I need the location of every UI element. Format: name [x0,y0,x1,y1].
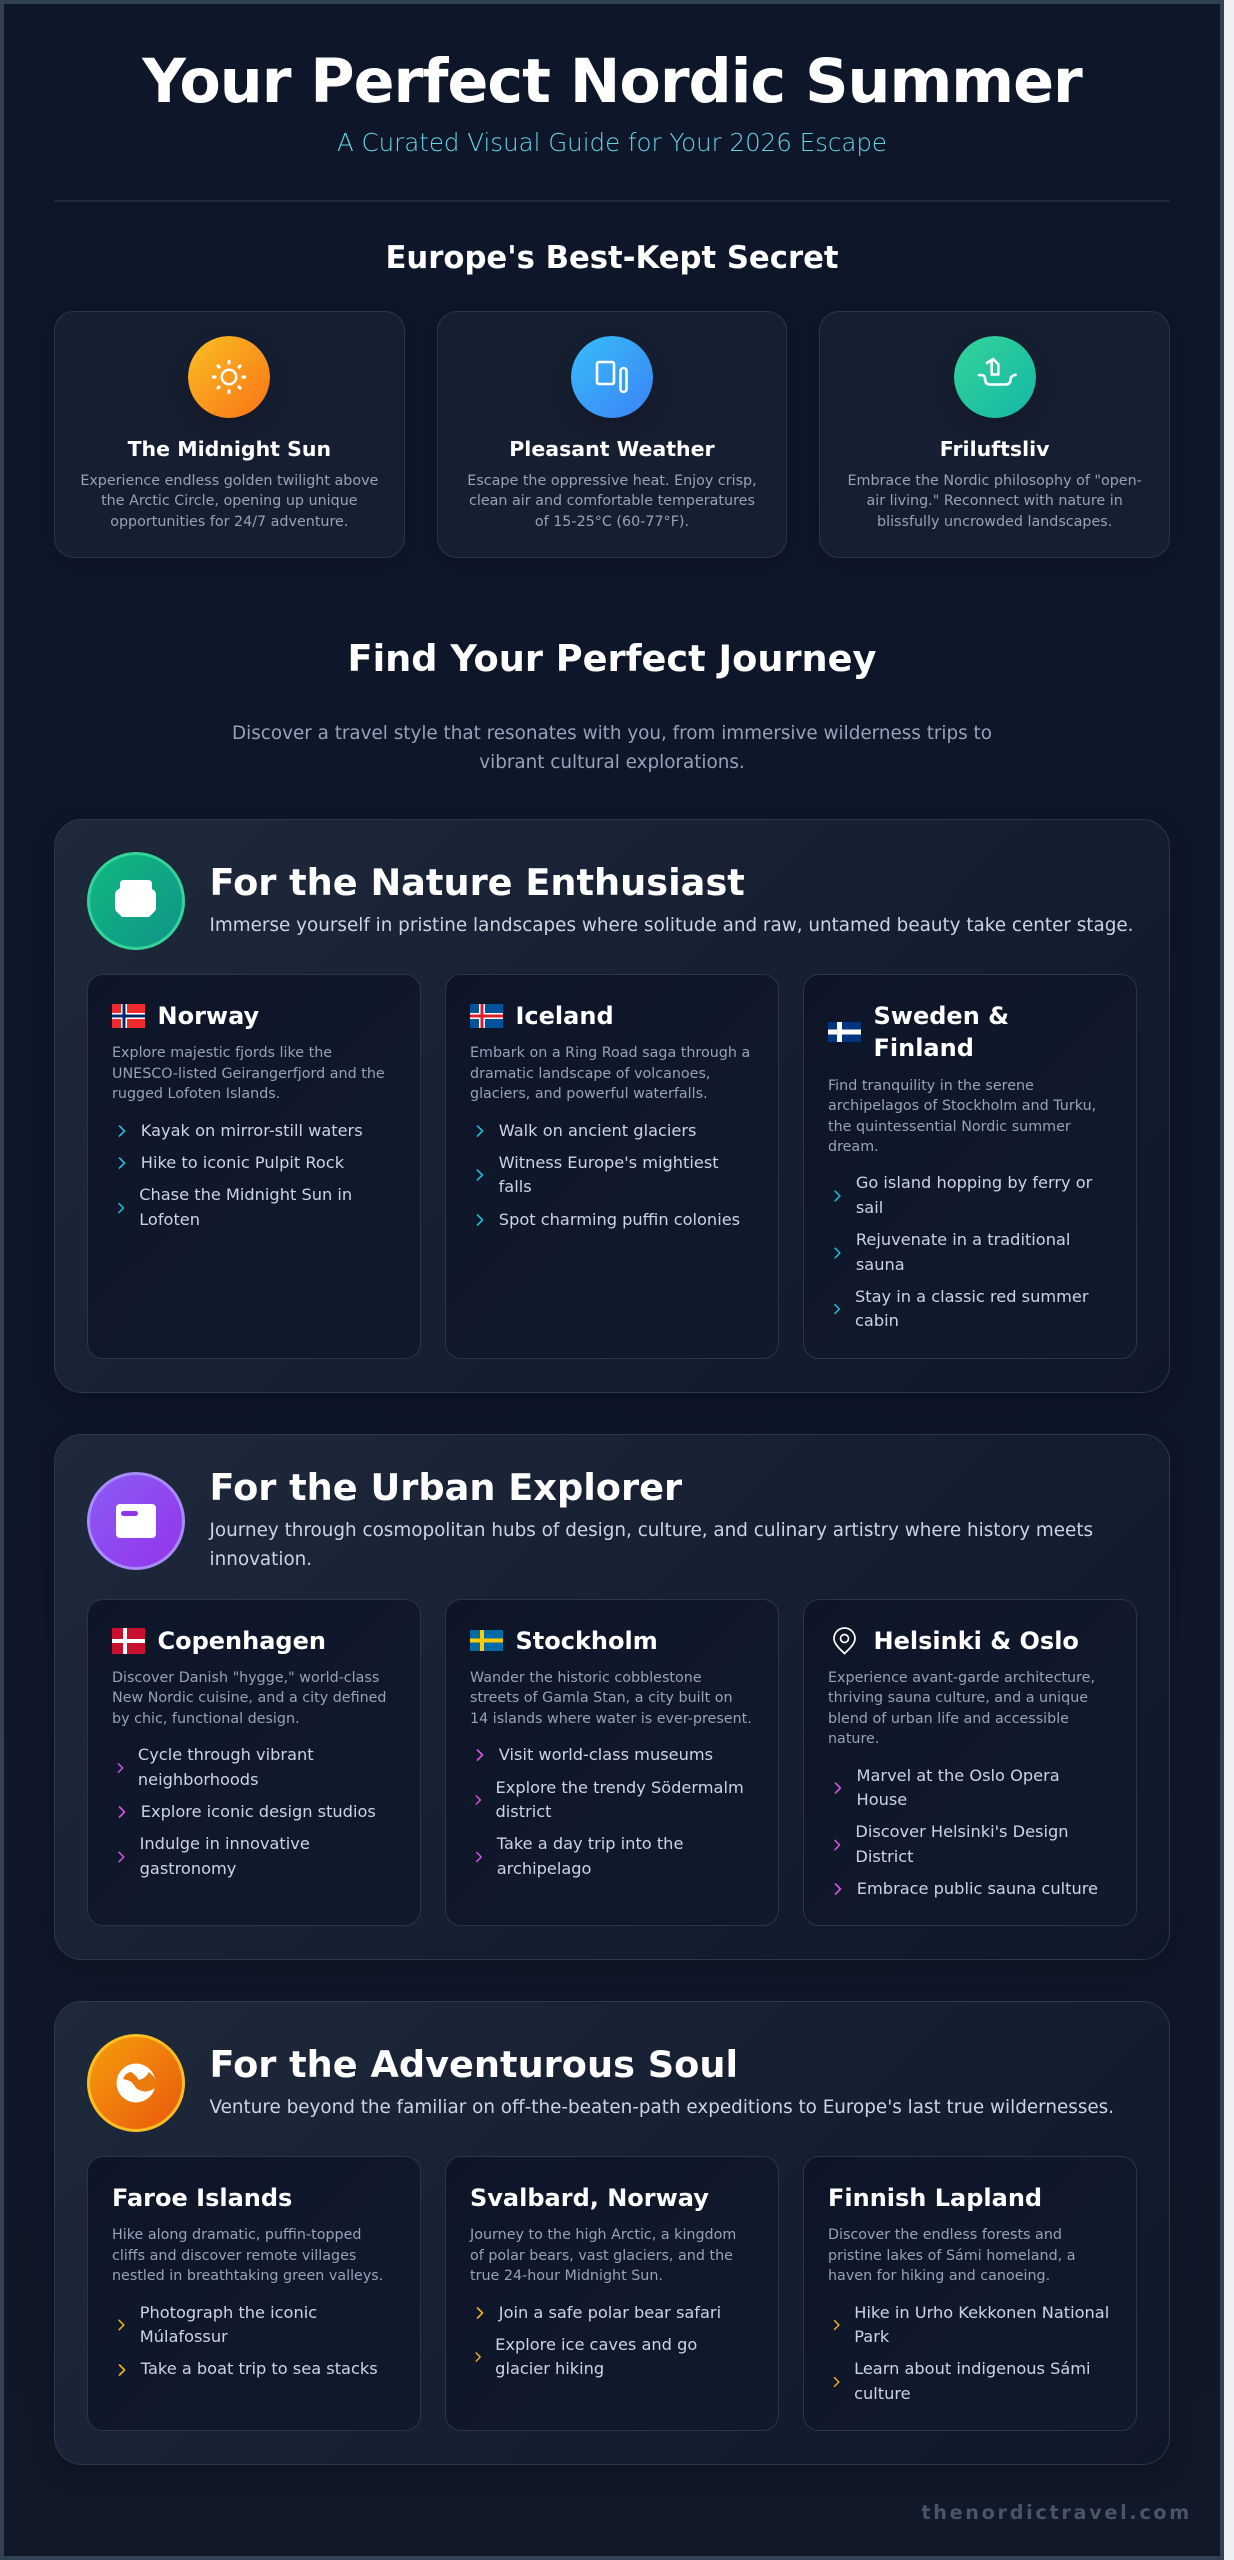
footer website: thenordictravel.com [921,2501,1192,2524]
subtitle: A Curated Visual Guide for Your 2026 Escape [337,128,887,157]
card title with flag [112,1002,259,1030]
section header [87,1466,1093,1570]
card text: Experience avant-garde architecture, thriving sauna culture, and a unique blend of urban life and accessible nature. [828,1670,1095,1747]
activities list: Stay in a classic red summer cabin [855,1287,1088,1330]
panel: urban explorer [54,1434,1170,1960]
activities list: Rejuvenate in a traditional sauna [856,1230,1070,1274]
title: Your Perfect Nordic Summer [142,47,1082,117]
card: Norway [87,974,421,1358]
activities list: Walk on ancient glaciers [499,1121,696,1140]
card title: Finnish Lapland [828,2184,1042,2212]
panel: pleasant weather [437,311,787,558]
header text [208,1466,1093,1570]
activities list [834,1766,1098,1898]
activities list: Indulge in innovative gastronomy [140,1834,310,1878]
icon: nature badge [87,852,185,950]
panel: nature enthusiast [54,819,1170,1393]
activities list: Photograph the iconic Múlafossur [140,2303,317,2346]
card: Copenhagen [87,1599,421,1926]
card title: Faroe Islands [112,2184,292,2212]
header text [210,2043,1114,2118]
card text: Hike along dramatic, puffin-topped cliffs and discover remote villages nestled in breathtaking green valleys. [112,2227,383,2284]
activities list: Spot charming puffin colonies [499,1210,740,1229]
section title: For the Adventurous Soul [210,2043,738,2086]
card heading: Friluftsliv [940,437,1050,461]
card text: Journey to the high Arctic, a kingdom of polar bears, vast glaciers, and the true 24-hour Midnight Sun. [470,2227,736,2284]
card text: Embark on a Ring Road saga through a dramatic landscape of volcanoes, glaciers, and powerful waterfalls. [470,1045,750,1102]
card: Svalbard [445,2156,779,2431]
destination cards [87,974,1137,1359]
activities list: Hike to iconic Pulpit Rock [141,1153,344,1172]
card text: Find tranquility in the serene archipelagos of Stockholm and Turku, the quintessential Nordic summer dream. [828,1078,1096,1155]
card heading: The Midnight Sun [128,437,331,461]
icon: adventure badge [87,2034,185,2132]
card: Stockholm [445,1599,779,1926]
intro text: Discover a travel style that resonates with you, from immersive wilderness trips to vibrant cultural explorations. [232,723,992,773]
activities list: Go island hopping by ferry or sail [856,1173,1092,1217]
card title with flag: Norway [158,1002,259,1030]
activities list [476,1121,740,1229]
card text: Discover Danish "hygge," world-class New Nordic cuisine, and a city defined by chic, functional design. [112,1670,387,1727]
activities list: Join a safe polar bear safari [499,2303,721,2322]
header text [210,861,1133,936]
activities list: Take a boat trip to sea stacks [141,2359,378,2378]
icon: sun [188,336,270,418]
card title with flag: Finland [874,1034,974,1062]
activities list: Hike in Urho Kekkonen National Park [854,2303,1109,2346]
section description: Journey through cosmopolitan hubs of design, culture, and culinary artistry where history meets innovation. [210,1520,1093,1570]
activities list [475,2303,721,2378]
icon: boat and cabin [954,336,1036,418]
section description: Venture beyond the familiar on off-the-beaten-path expeditions to Europe's last true wildernesses. [210,2097,1114,2118]
activities list: Embrace public sauna culture [857,1879,1098,1898]
card title with flag: Stockholm [516,1627,658,1655]
card title with flag: Iceland [516,1002,614,1030]
activities list [118,2303,378,2378]
card heading: Pleasant Weather [509,437,715,461]
heading: find your perfect journey: Find Your Perfect Journey [348,637,876,680]
card title with flag [828,1002,1009,1062]
activities list: Witness Europe's mightiest falls [499,1153,719,1196]
card: Faroe Islands [87,2156,421,2431]
panel: adventurous soul [54,2001,1170,2465]
destination cards [87,1599,1137,1926]
activities list: Explore the trendy Södermalm district [496,1778,744,1821]
activities list [476,1745,744,1878]
activities list: Learn about indigenous Sámi culture [854,2359,1091,2403]
destination cards [87,2156,1137,2431]
card text: Experience endless golden twilight above the Arctic Circle, opening up unique opportunities for 24/7 adventure. [80,473,378,530]
activities list [118,1745,376,1878]
activities list: Cycle through vibrant neighborhoods [138,1745,314,1789]
section header [87,852,1133,950]
activities list: Explore ice caves and go glacier hiking [495,2335,697,2378]
card title with flag: Copenhagen [158,1627,326,1655]
activities list: Kayak on mirror-still waters [141,1121,363,1140]
card text: Wander the historic cobblestone streets of Gamla Stan, a city built on 14 islands where water is ever-present. [470,1670,752,1727]
section description: Immerse yourself in pristine landscapes where solitude and raw, untamed beauty take center stage. [210,915,1133,936]
card: Sweden and Finland [803,974,1137,1358]
heading: Europe's best-kept secret: Europe's Best-Kept Secret [385,241,839,276]
activities list: Explore iconic design studios [141,1802,376,1821]
activities list: Visit world-class museums [499,1745,713,1764]
section title: For the Urban Explorer [210,1466,682,1509]
card text: Discover the endless forests and pristine lakes of Sámi homeland, a haven for hiking and canoeing. [828,2227,1076,2284]
activities list [834,1173,1092,1330]
activities list: Chase the Midnight Sun in Lofoten [139,1185,352,1229]
icon: urban badge [87,1472,185,1570]
icon: weather panels [571,336,653,418]
activities list: Discover Helsinki's Design District [855,1822,1069,1866]
activities list: Take a day trip into the archipelago [497,1834,683,1878]
activities list [118,1121,363,1229]
card title: Svalbard, Norway [470,2184,709,2212]
card title with flag: Sweden & [874,1002,1009,1030]
panel: the midnight sun [54,311,405,558]
section title: For the Nature Enthusiast [210,861,745,904]
activities list [834,2303,1109,2403]
card text: Explore majestic fjords like the UNESCO-listed Geirangerfjord and the rugged Lofoten Islands. [112,1045,385,1102]
card title with flag [470,1002,614,1030]
activities list: Marvel at the Oslo Opera House [857,1766,1060,1809]
card text: Embrace the Nordic philosophy of "open-air living." Reconnect with nature in blissfully uncrowded landscapes. [848,473,1142,530]
panel: friluftsliv [819,311,1170,558]
card: Helsinki and Oslo [803,1599,1137,1926]
card title with pin icon: Helsinki & Oslo [874,1627,1079,1655]
card: Iceland [445,974,779,1358]
section header [87,2034,1114,2132]
card text: Escape the oppressive heat. Enjoy crisp, clean air and comfortable temperatures of 15-25°C (60-77°F). [467,473,757,530]
card: Finnish Lapland [803,2156,1137,2431]
